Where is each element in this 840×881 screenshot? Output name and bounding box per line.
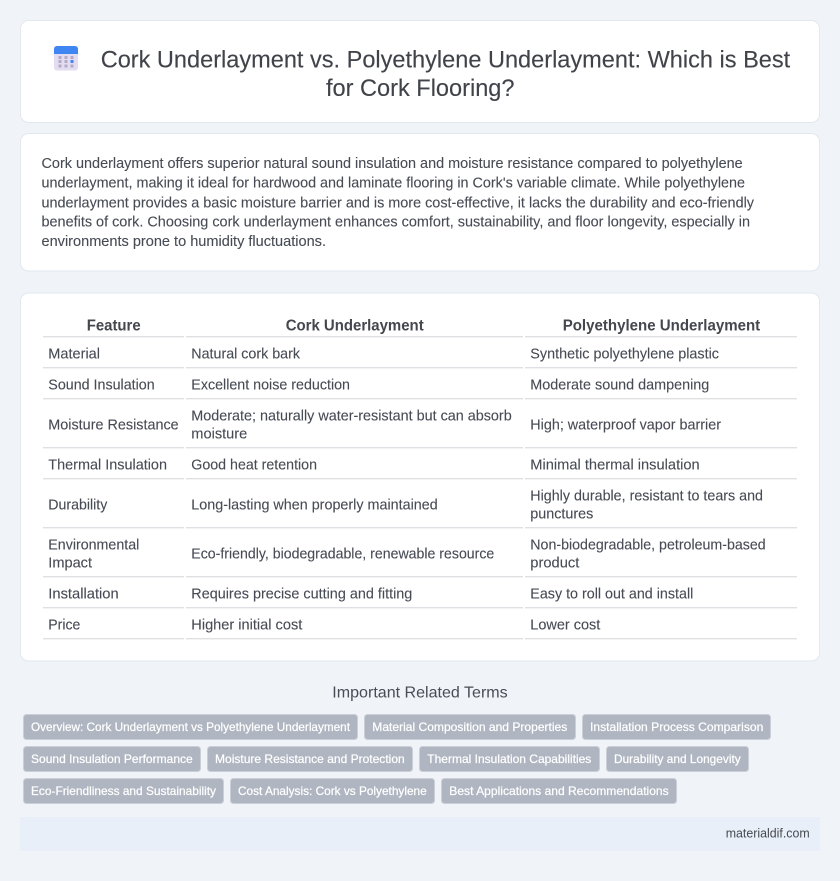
table header: Polyethylene Underlayment bbox=[563, 318, 760, 335]
row: thermal insulation: Good heat retention bbox=[191, 457, 317, 473]
tag: Moisture Resistance and Protection bbox=[215, 752, 405, 766]
row: sound insulation: Sound Insulation bbox=[48, 377, 155, 393]
row: environmental impact: Impact bbox=[48, 555, 92, 571]
row: durability: Durability bbox=[48, 497, 108, 513]
text block: summary paragraph: Cork underlayment offers superior natural sound insulation and moisture resistance compared to polyethylene bbox=[42, 156, 743, 172]
row: moisture resistance: moisture bbox=[191, 426, 247, 442]
panel: comparison table bbox=[20, 293, 820, 661]
row: thermal insulation bbox=[48, 457, 700, 473]
row: installation bbox=[48, 586, 693, 602]
tag: Installation Process Comparison bbox=[590, 720, 763, 734]
title: Cork Underlayment vs. Polyethylene Underlayment: Which is Best bbox=[101, 46, 790, 73]
row: durability: Long-lasting when properly maintained bbox=[191, 497, 438, 513]
tag: Best Applications and Recommendations bbox=[449, 784, 669, 798]
tag: Overview: Cork Underlayment vs Polyethylene Underlayment bbox=[31, 720, 351, 734]
tag: Material Composition and Properties bbox=[372, 720, 567, 734]
text block: summary paragraph bbox=[42, 156, 755, 250]
table header: Cork Underlayment bbox=[286, 318, 424, 335]
text block: summary paragraph: underlayment provides a basic moisture barrier and is more cost-effective, it lacks the durability and eco-friendly bbox=[42, 195, 755, 211]
row: moisture resistance: High; waterproof vapor barrier bbox=[530, 417, 721, 433]
row: price: Price bbox=[48, 617, 80, 633]
tag: Thermal Insulation Capabilities bbox=[427, 752, 591, 766]
row: durability: punctures bbox=[530, 506, 593, 522]
panel: summary bbox=[20, 134, 820, 271]
panel: header bbox=[20, 20, 820, 122]
title bbox=[101, 46, 790, 102]
row: environmental impact: Non-biodegradable, petroleum-based bbox=[530, 537, 766, 553]
tag bbox=[208, 746, 412, 772]
row: price: Lower cost bbox=[530, 617, 600, 633]
tag: Eco-Friendliness and Sustainability bbox=[31, 784, 216, 798]
row: moisture resistance: Moisture Resistance bbox=[48, 417, 179, 433]
row: material: Natural cork bark bbox=[191, 346, 301, 362]
row: material: Material bbox=[48, 346, 100, 362]
tag: Sound Insulation Performance bbox=[31, 752, 193, 766]
row: moisture resistance bbox=[48, 408, 721, 442]
row: installation: Installation bbox=[48, 586, 119, 602]
tag bbox=[364, 714, 576, 740]
footer bbox=[20, 817, 820, 851]
row: installation: Easy to roll out and install bbox=[530, 586, 693, 602]
table header bbox=[87, 318, 760, 335]
row: environmental impact: product bbox=[530, 555, 579, 571]
row: moisture resistance: Moderate; naturally water-resistant but can absorb bbox=[191, 408, 512, 424]
table header: Feature bbox=[87, 318, 141, 335]
tag bbox=[24, 778, 224, 804]
text block: summary paragraph: environments prone to humidity fluctuations. bbox=[42, 234, 326, 250]
tag bbox=[606, 746, 748, 772]
row: sound insulation: Excellent noise reduction bbox=[191, 377, 350, 393]
tag bbox=[230, 778, 434, 804]
text block: summary paragraph: benefits of cork. Choosing cork underlayment enhances comfort, sustainability, and floor longevity, especially in bbox=[42, 215, 750, 231]
row: material: Synthetic polyethylene plastic bbox=[530, 346, 719, 362]
row: durability bbox=[48, 488, 763, 522]
row: material bbox=[48, 346, 719, 362]
row: price: Higher initial cost bbox=[191, 617, 302, 633]
row: sound insulation: Moderate sound dampening bbox=[530, 377, 709, 393]
tag bbox=[442, 778, 676, 804]
row: sound insulation bbox=[48, 377, 709, 393]
row: durability: Highly durable, resistant to tears and bbox=[530, 488, 763, 504]
row: environmental impact: Eco-friendly, biodegradable, renewable resource bbox=[191, 546, 494, 562]
row: installation: Requires precise cutting and fitting bbox=[191, 586, 412, 602]
row: environmental impact: Environmental bbox=[48, 537, 139, 553]
row: thermal insulation: Minimal thermal insulation bbox=[530, 457, 700, 473]
heading: important related terms: Important Related Terms bbox=[332, 684, 508, 701]
tag: Cost Analysis: Cork vs Polyethylene bbox=[238, 784, 427, 798]
title: for Cork Flooring? bbox=[326, 75, 514, 102]
row: thermal insulation: Thermal Insulation bbox=[48, 457, 167, 473]
text block: summary paragraph: underlayment, making it ideal for hardwood and laminate flooring in Cork's variable climate. While polyethylene bbox=[42, 176, 745, 192]
tag bbox=[24, 746, 200, 772]
row: environmental impact bbox=[48, 537, 766, 571]
tag bbox=[420, 746, 600, 772]
footer: materialdif.com bbox=[726, 826, 810, 841]
tags: related terms bbox=[24, 714, 770, 804]
icon: calendar bbox=[54, 46, 78, 70]
row: price bbox=[48, 617, 600, 633]
tag: Durability and Longevity bbox=[614, 752, 741, 766]
tag bbox=[582, 714, 770, 740]
tag bbox=[24, 714, 358, 740]
